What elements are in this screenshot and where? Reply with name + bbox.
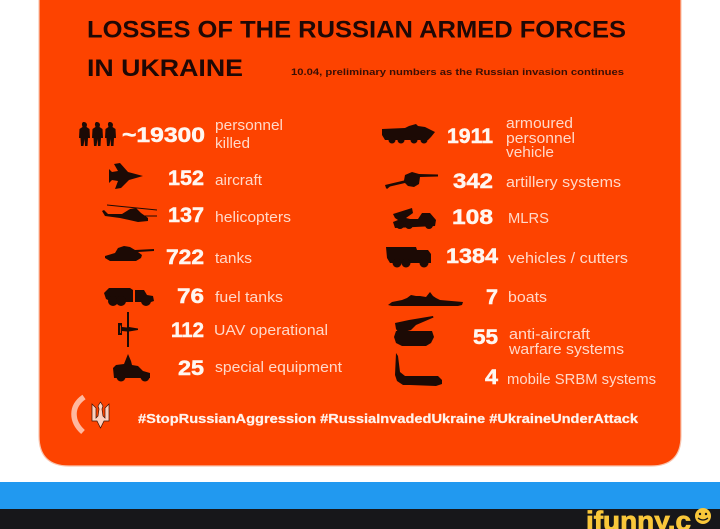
stat: APC: 1911 xyxy=(447,125,493,148)
icon: tank xyxy=(105,246,154,261)
stat: personnel: killed xyxy=(215,135,250,152)
stat: anti-aircraft: warfare systems xyxy=(508,341,624,358)
stat: SRBM xyxy=(485,366,656,389)
icon: fuel truck xyxy=(104,288,154,306)
stat: MLRS xyxy=(452,206,549,229)
stat: tanks: tanks xyxy=(215,250,252,267)
stat: helicopters xyxy=(168,204,291,227)
icon: UAV xyxy=(118,312,138,347)
icon: arc logo xyxy=(74,397,84,432)
stat: vehicles: vehicles / cutters xyxy=(508,250,628,267)
stat: UAV xyxy=(171,319,328,342)
stat: boats xyxy=(486,286,547,309)
title xyxy=(87,16,626,82)
stat: fuel tanks: fuel tanks xyxy=(215,289,283,306)
stat: MLRS: MLRS xyxy=(508,210,549,227)
stat: vehicles xyxy=(446,245,628,268)
icon: soldiers xyxy=(79,122,116,146)
stat: APC: personnel xyxy=(506,130,575,147)
stat: personnel xyxy=(122,117,283,152)
stat: tanks: 722 xyxy=(166,246,204,269)
icon: artillery xyxy=(385,172,438,189)
footer: blue band xyxy=(0,482,720,509)
stat: special equipment xyxy=(178,357,343,380)
stat: personnel: ~19300 xyxy=(122,124,205,147)
stat: boats: boats xyxy=(508,289,547,306)
hashtags: #StopRussianAggression #RussiaInvadedUkraine #UkraineUnderAttack xyxy=(138,411,639,426)
stat: boats: 7 xyxy=(486,286,498,309)
stat: APC xyxy=(447,115,575,161)
icon: helicopter xyxy=(102,204,157,222)
stat: special equipment: 25 xyxy=(178,357,204,380)
icon: anti-aircraft system xyxy=(394,316,434,346)
stat: SRBM: 4 xyxy=(485,366,498,389)
icon: boat xyxy=(388,292,463,306)
stat: anti-aircraft: 55 xyxy=(473,326,498,349)
stat: tanks xyxy=(166,246,252,269)
stat: APC: vehicle xyxy=(506,144,554,161)
stat: anti-aircraft xyxy=(473,326,624,358)
title: LOSSES OF THE RUSSIAN ARMED FORCES xyxy=(87,16,626,44)
stat: SRBM: mobile SRBM systems xyxy=(507,371,656,388)
icon: mobile SRBM launcher xyxy=(395,353,442,386)
stat: vehicles: 1384 xyxy=(446,245,498,268)
icon: aircraft xyxy=(109,163,143,189)
title: IN UKRAINE xyxy=(87,55,243,82)
stat: UAV: 112 xyxy=(171,319,204,342)
stat: anti-aircraft: anti-aircraft xyxy=(509,326,591,343)
stat: UAV: UAV operational xyxy=(214,322,328,339)
stat: fuel tanks xyxy=(177,285,283,308)
stat: helicopters: helicopters xyxy=(215,209,291,226)
stat: personnel: personnel xyxy=(215,117,283,134)
panel: orange card xyxy=(39,0,681,466)
icon: special equipment xyxy=(113,354,150,382)
stat: aircraft: aircraft xyxy=(215,172,263,189)
footer: dark band xyxy=(0,509,720,529)
stat: artillery: 342 xyxy=(453,170,493,193)
stat: aircraft xyxy=(168,167,263,190)
stat: aircraft: 152 xyxy=(168,167,204,190)
stat: special equipment: special equipment xyxy=(215,359,343,376)
stat: fuel tanks: 76 xyxy=(177,285,204,308)
stat: MLRS: 108 xyxy=(452,206,493,229)
icon: truck xyxy=(386,247,431,268)
stat: helicopters: 137 xyxy=(168,204,204,227)
stat: APC: armoured xyxy=(506,115,573,132)
icon: trident xyxy=(92,402,109,428)
icon: MLRS xyxy=(393,208,436,229)
stat: artillery xyxy=(453,170,621,193)
icon: armoured personnel vehicle xyxy=(382,124,435,144)
subtitle: 10.04, preliminary numbers as the Russian invasion continues xyxy=(291,67,624,78)
stat: artillery: artillery systems xyxy=(506,174,621,191)
